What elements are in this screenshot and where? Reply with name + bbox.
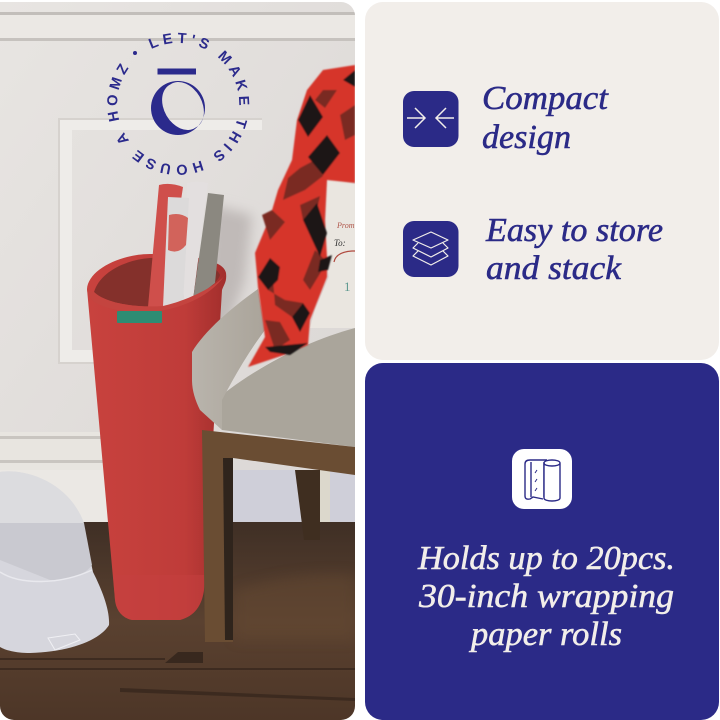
clear lid	[0, 471, 109, 653]
pillow: To:	[334, 238, 346, 248]
logo bar	[158, 68, 196, 74]
chair seat	[222, 328, 355, 447]
pillow: Prom	[336, 221, 355, 230]
logo ring	[151, 81, 205, 135]
panel: features	[365, 2, 719, 360]
icon: stacked layers	[403, 221, 458, 277]
leg shadow side	[223, 458, 233, 640]
wall mouldings	[0, 12, 355, 522]
panel: product photo	[0, 2, 355, 720]
heading: compact design: Compact	[482, 80, 610, 117]
text: holds up to 20 rolls: 30-inch wrapping	[418, 578, 674, 615]
base band shading	[113, 575, 206, 620]
red storage bin	[87, 182, 226, 620]
brand logo badge	[107, 32, 250, 175]
back leg	[295, 470, 320, 522]
circular slogan: LET'S MAKE THIS HOUSE A HOMZ	[107, 32, 250, 175]
wrapping paper rolls	[148, 182, 224, 307]
text: holds up to 20 rolls: Holds up to 20pcs.	[417, 540, 675, 577]
bin body	[87, 254, 226, 620]
plaid blanket	[248, 65, 355, 367]
heading: easy to store and stack: Easy to store	[485, 212, 663, 249]
text: holds up to 20 rolls: paper rolls	[469, 616, 622, 653]
pillow: 1	[344, 279, 350, 294]
panel: capacity	[365, 363, 719, 720]
chair arm	[192, 289, 265, 430]
bin interior	[94, 258, 220, 306]
front rim	[87, 274, 226, 307]
bin handle	[117, 311, 162, 323]
heading: easy to store and stack: and stack	[486, 250, 622, 287]
seat rail and front leg	[202, 430, 355, 642]
floor	[0, 522, 355, 720]
pillow	[310, 178, 355, 328]
wall	[0, 2, 355, 470]
chair	[192, 289, 355, 642]
heading: compact design: design	[482, 119, 571, 156]
icon: compact arrows	[403, 91, 458, 147]
icon: paper roll	[512, 449, 572, 509]
logo dot	[133, 51, 137, 55]
